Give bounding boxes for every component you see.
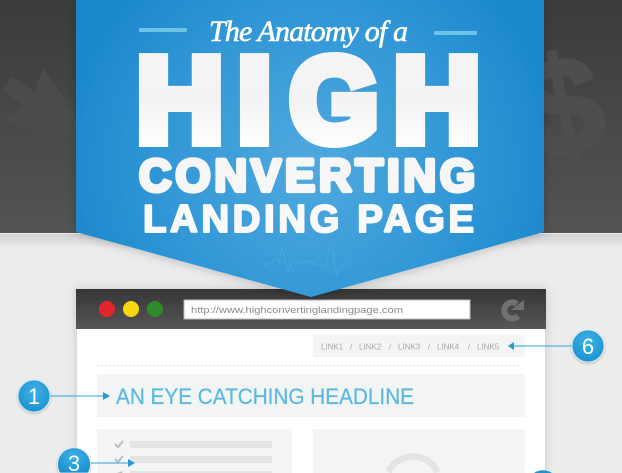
browser toolbar	[76, 289, 546, 329]
icon: ghost dollar sign: $	[508, 22, 617, 191]
title word: HIGH	[137, 34, 480, 167]
navigation links: LINK2	[359, 342, 382, 352]
icon: check	[117, 471, 123, 473]
panel: benefits list	[97, 429, 292, 473]
panel: browser window	[76, 289, 546, 473]
placeholder ring	[388, 456, 438, 472]
icon: yellow window button	[123, 301, 139, 317]
title word: HIGH: I	[238, 34, 271, 167]
headline panel: AN EYE CATCHING HEADLINE	[116, 384, 414, 409]
decorative rule left	[139, 28, 187, 32]
icon: green window button	[147, 301, 163, 317]
browser page body	[77, 329, 545, 473]
icon: ghost arrow	[2, 68, 80, 143]
title word: HIGH: H	[394, 34, 480, 167]
navigation links: LINK3	[398, 342, 421, 352]
headline panel	[97, 374, 525, 417]
callout 1	[18, 380, 110, 412]
navigation links: /	[389, 342, 392, 352]
icon: heartbeat line	[263, 246, 352, 275]
callout badge cut off at bottom edge	[534, 470, 552, 473]
icon: check	[115, 456, 123, 462]
icon: refresh	[504, 300, 524, 318]
dark header band	[0, 0, 622, 233]
title word: HIGH: H	[137, 34, 223, 167]
navigation links: LINK5	[477, 342, 500, 352]
navigation links: /	[468, 342, 471, 352]
icon: red window button	[99, 301, 115, 317]
navigation links: /	[428, 342, 431, 352]
list bar	[130, 456, 272, 463]
title line: The Anatomy of a: The Anatomy of a	[209, 15, 408, 48]
title words: LANDING PAGE: LANDING PAGE	[143, 198, 474, 241]
navigation links: /	[350, 342, 353, 352]
page background	[0, 232, 622, 473]
title word: HIGH: G	[290, 34, 378, 167]
panel: image placeholder	[313, 429, 525, 473]
callout 3	[57, 448, 135, 473]
list bar	[130, 441, 272, 448]
navigation links: LINK4	[437, 342, 460, 352]
list bar	[130, 471, 272, 473]
callout 6	[508, 330, 604, 362]
navigation links: LINK1	[321, 342, 344, 352]
address bar: http://www.highconvertinglandingpage.com	[191, 305, 403, 316]
title word: CONVERTING: CONVERTING	[139, 150, 475, 201]
address bar	[184, 300, 470, 319]
icon: check	[115, 441, 123, 447]
panel: blue ribbon banner	[76, 0, 544, 297]
navigation links	[313, 335, 525, 357]
callout 6: 6	[582, 334, 594, 359]
decorative rule right	[434, 31, 477, 35]
callout 1: 1	[28, 384, 40, 409]
